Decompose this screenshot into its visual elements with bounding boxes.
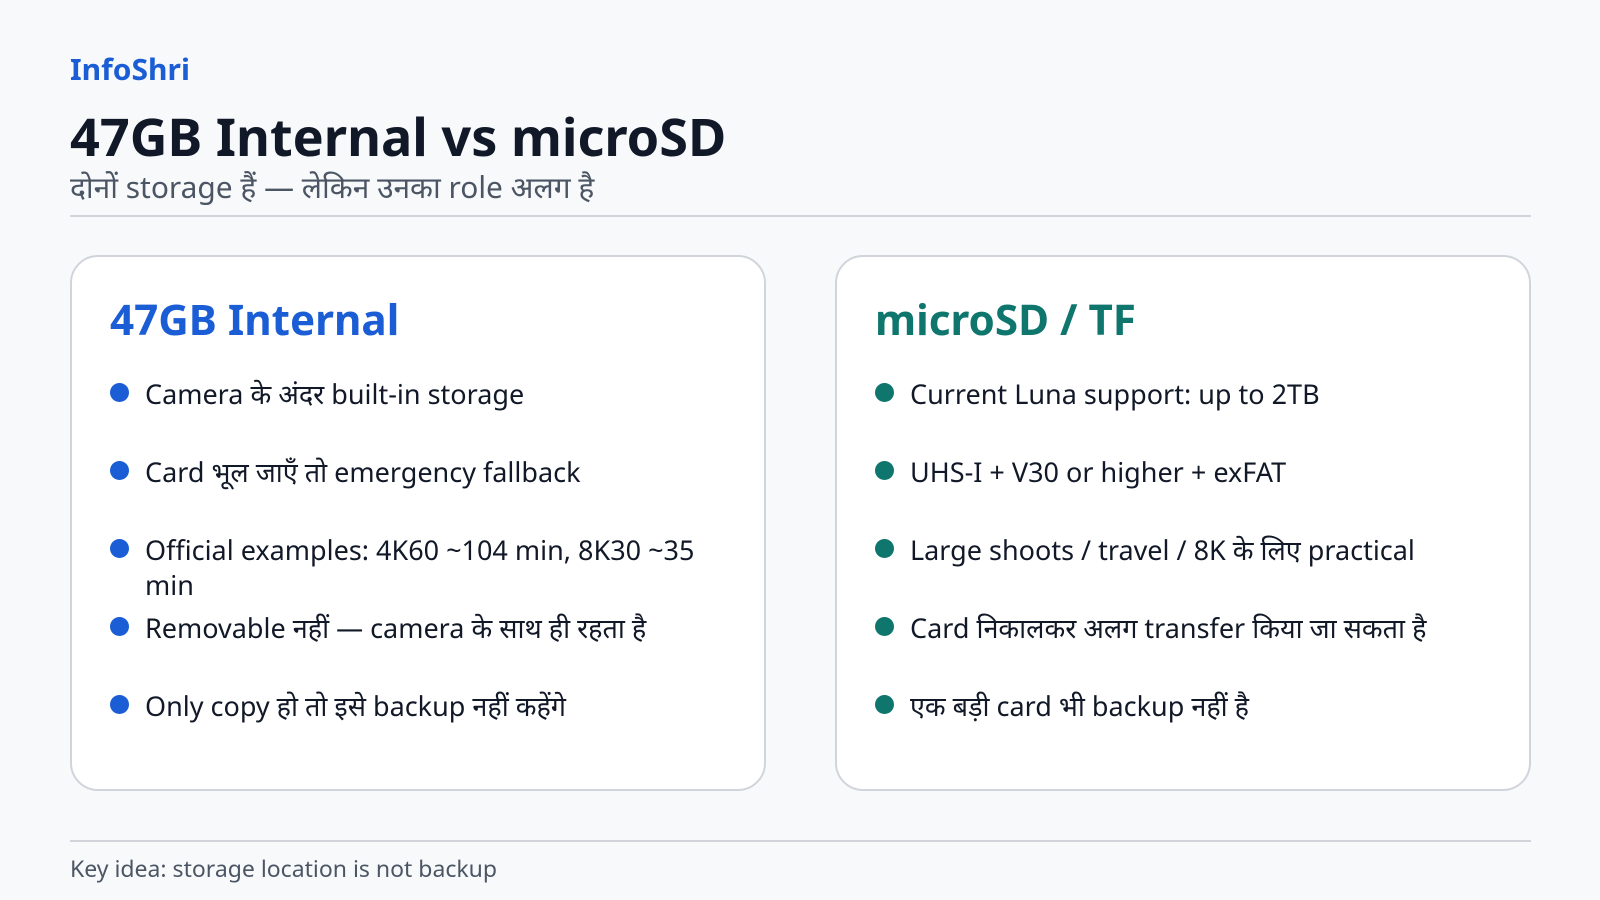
bullet 3: Official examples: 4K60 ~104 min, 8K30 ~35 min xyxy=(145,531,694,603)
panel: 47GB Internal xyxy=(70,255,766,791)
bullet 2: Card भूल जाएँ तो emergency fallback xyxy=(145,453,580,490)
bullet 1: Camera के अंदर built-in storage xyxy=(145,375,524,412)
bullet 3: Large shoots / travel / 8K के लिए practical xyxy=(910,531,1415,568)
subtitle: दोनों storage हैं — लेकिन उनका role अलग है xyxy=(70,166,594,207)
bullet 5: एक बड़ी card भी backup नहीं है xyxy=(910,687,1249,724)
bullet 2: UHS-I + V30 or higher + exFAT xyxy=(910,453,1286,490)
bullet 1: Current Luna support: up to 2TB xyxy=(910,375,1320,412)
panel: microSD / TF xyxy=(835,255,1531,791)
panel heading: 47GB Internal xyxy=(110,291,399,348)
footer note: Key idea: storage location is not backup xyxy=(70,852,497,884)
title: 47GB Internal vs microSD xyxy=(70,101,726,172)
bullet 4: Removable नहीं — camera के साथ ही रहता है xyxy=(145,609,646,646)
brand label: InfoShri xyxy=(70,48,190,89)
bullet 5: Only copy हो तो इसे backup नहीं कहेंगे xyxy=(145,687,566,724)
bullet 4: Card निकालकर अलग transfer किया जा सकता है xyxy=(910,609,1426,646)
panel heading: microSD / TF xyxy=(875,291,1136,348)
